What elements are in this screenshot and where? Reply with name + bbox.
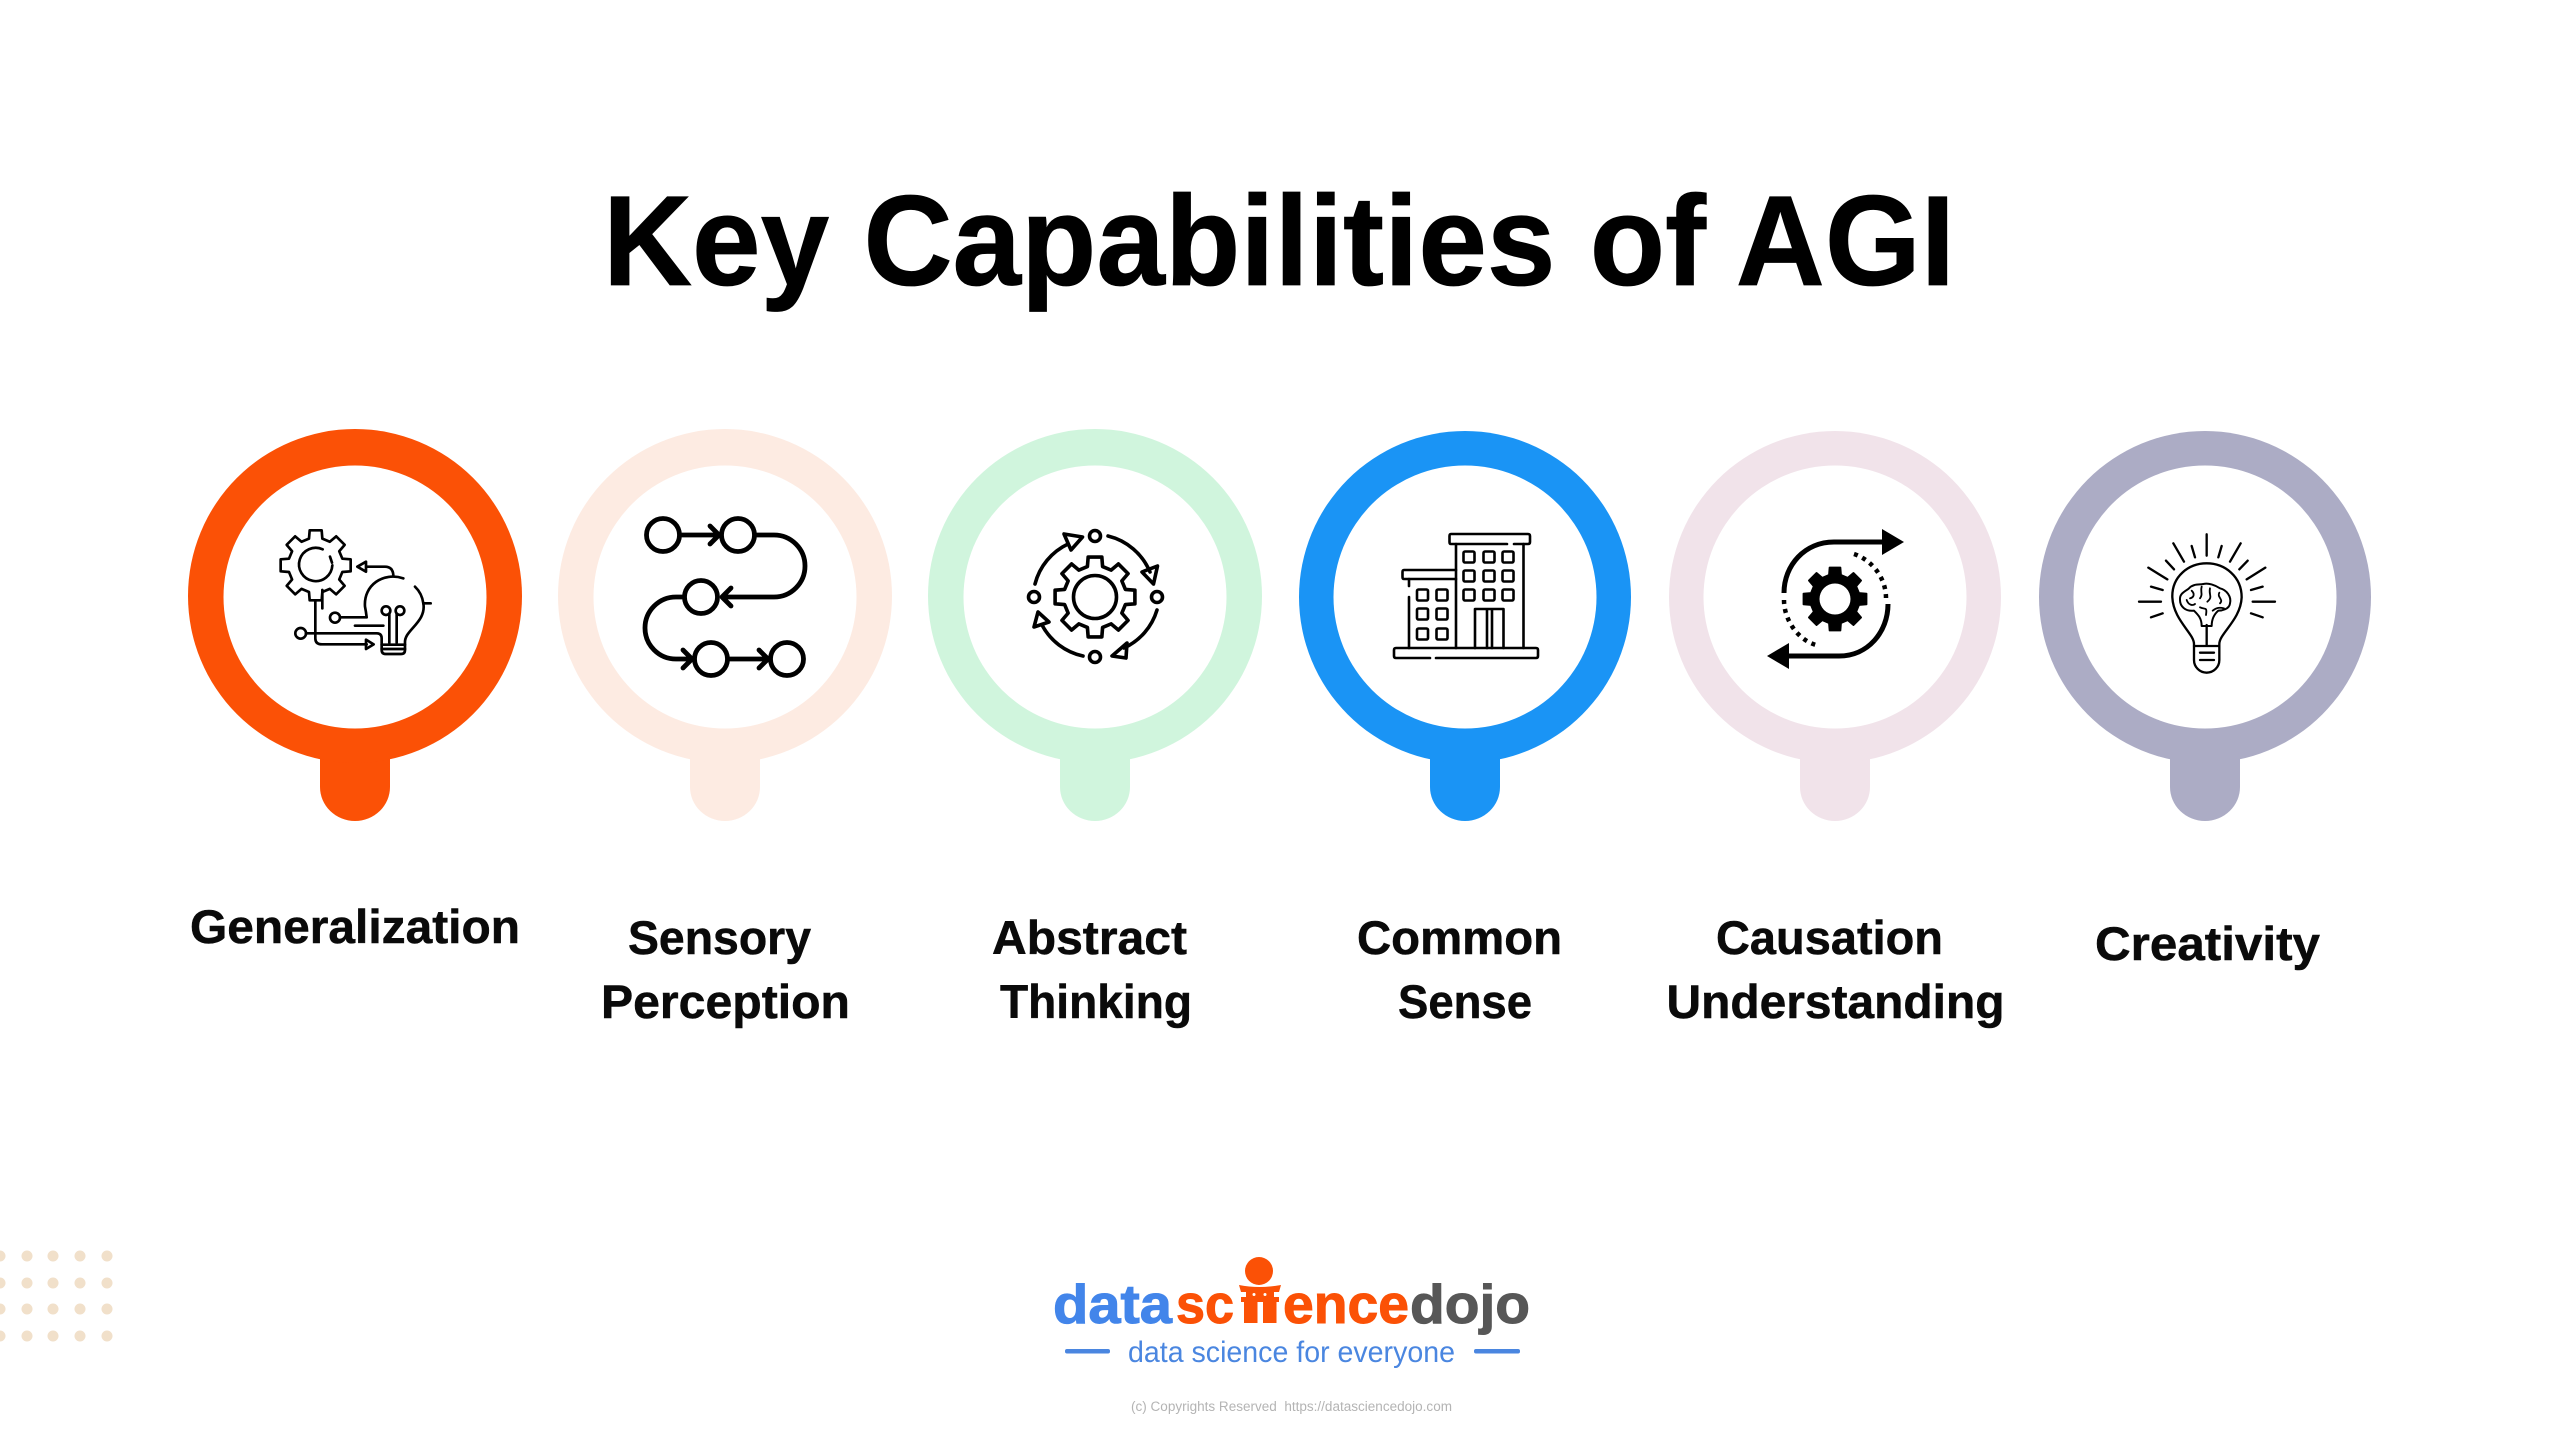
label: Perception [601,975,850,1028]
title: Key Capabilities of AGI [603,170,1955,313]
pin ring: pink [1669,431,2001,821]
panel: Sensory Perception [558,429,892,1028]
label: Common [1357,911,1562,964]
panel: Creativity [2039,431,2371,970]
pin ring: peach [558,429,892,821]
label [992,911,1192,1028]
copyright note: (c) Copyrights Reserved https://datasciencedojo.com [1131,1399,1452,1414]
pin ring: green [928,429,1262,821]
logo word: sc: sc [1176,1273,1234,1335]
icon: gear and light bulb [281,530,431,654]
pin ring: slate [2039,431,2371,821]
pin ring: orange [188,429,522,821]
pin ring: blue [1299,431,1631,821]
tagline rule right [1474,1349,1520,1354]
label: Sense [1398,975,1532,1028]
logo tagline: data science for everyone [1128,1336,1455,1369]
logo: data science dojo [1053,1257,1530,1369]
label: Generalization [190,900,520,953]
logo mark: torii gate with sun [1239,1257,1281,1323]
label [1666,911,2004,1028]
decorative dot grid [0,1250,112,1342]
icon: connected path nodes [645,518,805,676]
tagline rule left [1065,1349,1110,1354]
logo word: ence: ence [1283,1273,1409,1335]
icon: gear with cycle arrows [1767,529,1904,669]
label: Sensory [628,911,811,964]
panel: Causation Understanding [1666,431,2004,1028]
logo word: data: data [1053,1273,1172,1335]
label: Abstract [992,911,1187,964]
label: Causation [1716,911,1943,964]
label: Understanding [1666,975,2004,1028]
label [601,911,850,1028]
label: Creativity [2095,917,2320,970]
icon: gear with rotating arrows [1028,530,1162,662]
panel: Common Sense [1299,431,1631,1028]
icon: office buildings [1394,534,1538,658]
label: Thinking [1000,975,1192,1028]
label [1357,911,1562,1028]
panel: Generalization [188,429,522,953]
icon: light bulb with brain [2139,534,2275,673]
panel: Abstract Thinking [928,429,1262,1028]
logo word: dojo: dojo [1410,1273,1530,1335]
